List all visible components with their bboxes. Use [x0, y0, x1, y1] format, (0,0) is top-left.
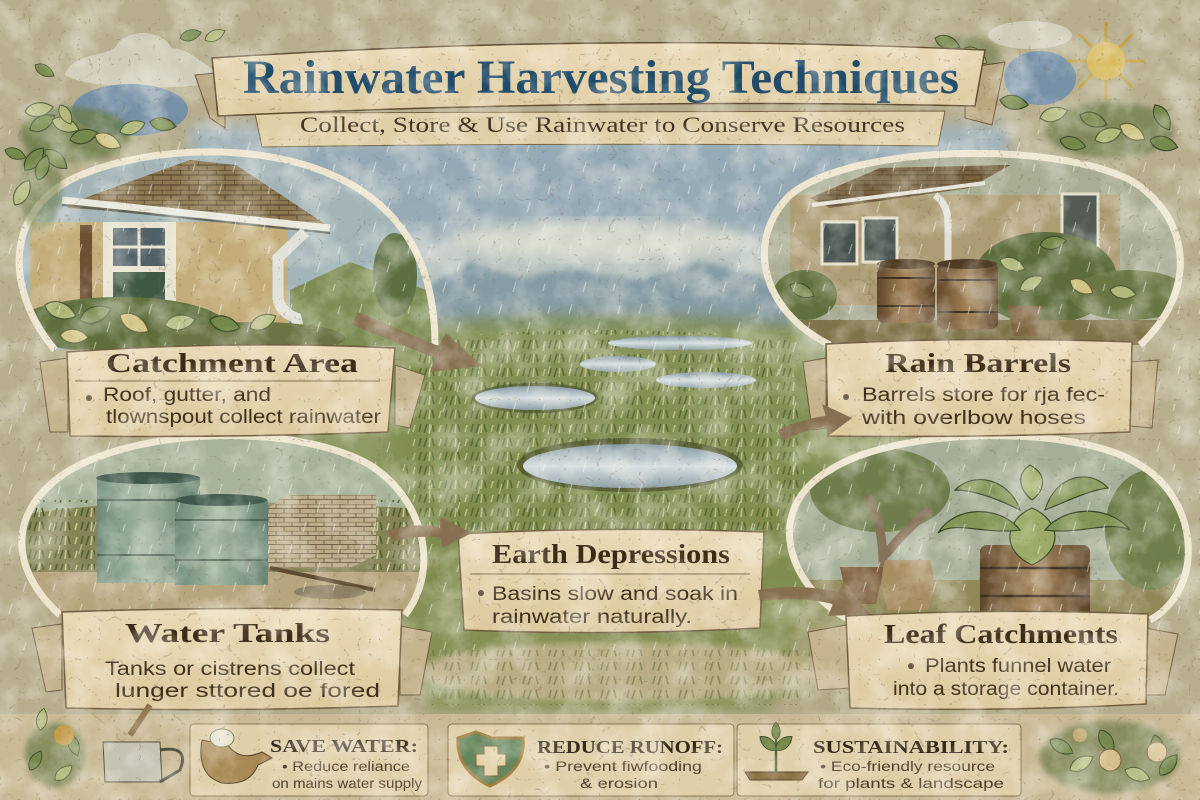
lower muddy ground [415, 642, 825, 705]
label: rain barrels [803, 339, 1158, 436]
sky [300, 145, 900, 260]
gutter [62, 200, 330, 228]
meadow [380, 315, 830, 710]
main ribbon [212, 43, 985, 116]
label: leaf catchments: Plants funnel water [925, 656, 1112, 677]
label: water tanks: Tanks or cistrens collect [105, 659, 356, 680]
pond: large [517, 438, 743, 492]
bottom strip background [0, 714, 1200, 800]
arrow: earth depressions to leaf catchments [758, 582, 870, 616]
rain overlay [0, 130, 1200, 650]
porch post [80, 225, 92, 300]
label: leaf catchments: Leaf Catchments [884, 619, 1118, 649]
label: rain barrels: with overlbow hoses [861, 408, 1086, 429]
label: leaf catchments: into a storage container. [893, 679, 1119, 700]
label: water tanks [32, 608, 432, 710]
panel: reduce runoff: • Prevent fiwfooding [544, 758, 702, 774]
subtitle ribbon [255, 111, 945, 147]
downspout [935, 195, 948, 262]
panel: save water [190, 724, 428, 796]
pond: small centre [580, 356, 656, 372]
pond: far [608, 336, 752, 350]
panel: reduce runoff: REDUCE RUNOFF: [537, 737, 723, 757]
icon: water jug [201, 729, 272, 783]
panel: save water: • Reduce reliance [282, 758, 410, 774]
panel: catchment scene [0, 140, 440, 355]
decoration: top-right sun and foliage [930, 21, 1179, 158]
panel: save water: SAVE WATER: [270, 736, 418, 756]
panel: leaf catchment scene [760, 430, 1200, 620]
panel: save water: on mains water supply [272, 775, 422, 791]
barrel: right [937, 259, 998, 329]
title: Rainwater Harvesting Techniques [243, 51, 959, 104]
hose [270, 568, 375, 590]
windows [822, 194, 1098, 264]
label: rain barrels: Barrels store for rja fec- [862, 385, 1105, 406]
label: catchment area: Roof, gutter, and [103, 385, 271, 406]
window [103, 222, 176, 302]
subtitle ribbon: Collect, Store & Use Rainwater to Conserve Resources [300, 112, 905, 137]
small tank [175, 494, 268, 585]
label: earth depressions: rainwater naturally. [492, 607, 692, 628]
flower pot [1008, 306, 1042, 336]
panel: water tanks scene [18, 436, 428, 618]
pond: left [472, 383, 598, 413]
arrow: water tanks to earth depressions [388, 517, 472, 548]
roof [68, 160, 325, 224]
house [790, 195, 1120, 305]
brick cistern [268, 495, 376, 568]
arrow: catchment to ponds [352, 312, 482, 372]
panel: sustainability [737, 722, 1021, 796]
decoration: bottom-right foliage [1040, 721, 1182, 793]
panel: rain barrels scene [760, 150, 1184, 348]
house wall [30, 222, 288, 324]
label: water tanks: lunger sttored oe fored [115, 681, 380, 702]
panel: sustainability: • Eco-friendly resource [820, 758, 995, 774]
label: earth depressions: Basins slow and soak in [492, 584, 738, 605]
title banner [195, 43, 1005, 147]
shrubs [34, 297, 345, 350]
distant hills [430, 262, 790, 330]
large tank [96, 472, 200, 583]
wooden barrel [980, 545, 1090, 617]
label: water tanks: Water Tanks [125, 618, 330, 648]
label: earth depressions [458, 529, 764, 633]
panel: sustainability: for plants & landscape [818, 775, 1004, 791]
decoration: watering can and flowers [25, 705, 182, 787]
panel: reduce runoff: & erosion [580, 775, 658, 791]
arrow: ponds to rain barrels [778, 404, 852, 441]
large plant [938, 465, 1130, 565]
pond: right [656, 372, 756, 388]
plants [773, 232, 1190, 324]
panel: sustainability: SUSTAINABILITY: [813, 737, 1009, 757]
pot: centre [882, 560, 934, 610]
barrel: left [877, 259, 935, 323]
label: leaf catchments [808, 611, 1178, 709]
central landscape scene [190, 125, 1010, 715]
pot: left [840, 567, 884, 604]
downspout [278, 232, 305, 334]
label: catchment area: tlownspout collect rainwater [106, 407, 382, 428]
label: rain barrels: Rain Barrels [885, 348, 1071, 378]
panel: reduce runoff [448, 724, 734, 796]
icon: seedling [745, 722, 808, 780]
label: catchment area: Catchment Area [106, 348, 359, 378]
label: catchment area [40, 345, 425, 436]
label: earth depressions: Earth Depressions [492, 539, 730, 569]
decoration: top-left cloud and foliage [3, 26, 232, 230]
icon: shield [458, 732, 523, 786]
